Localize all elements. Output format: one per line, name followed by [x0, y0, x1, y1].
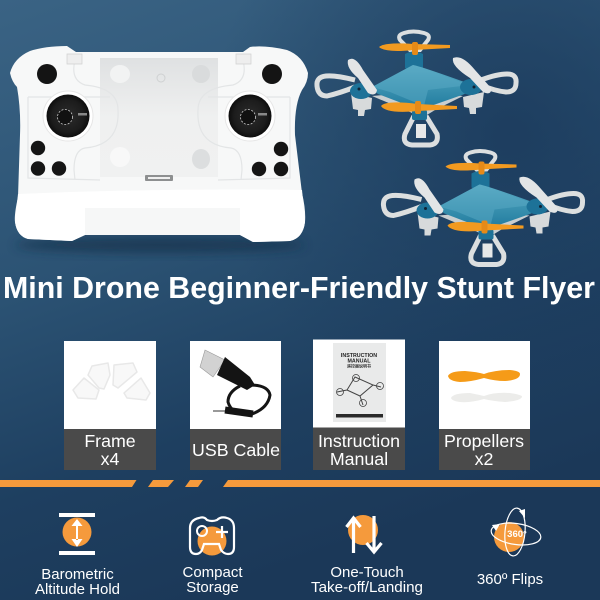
small buttons: [31, 141, 288, 176]
label: Barometric: [41, 566, 114, 583]
orange stripe: [0, 480, 600, 487]
feature: one-touch take-off/landing: Take-off/Landing: [311, 579, 423, 596]
icon: frames: [73, 363, 150, 400]
label: Propellers: [444, 431, 524, 451]
icon: manual: INSTRUCTION: [341, 353, 377, 359]
icon: up and down arrows: [346, 515, 382, 553]
drone: upper: [317, 32, 516, 145]
battery recess: [100, 58, 218, 177]
controller body: [10, 46, 308, 242]
controller: [10, 46, 308, 253]
card: usb cable: [190, 341, 281, 470]
title: Mini Drone Beginner-Friendly Stunt Flyer: [3, 270, 595, 305]
feature: compact storage: [182, 517, 243, 596]
feature: 360 flips: [477, 507, 543, 588]
feature: one-touch take-off/landing: [311, 515, 423, 596]
feature: compact storage: Storage: [186, 579, 239, 596]
icon: manual: MANUAL: [348, 358, 371, 364]
icon: orange propeller: [448, 370, 520, 382]
icon: altitude: [59, 513, 95, 555]
card: propellers: x2: [475, 449, 493, 469]
label: USB Cable: [192, 440, 280, 460]
feature: barometric altitude hold: [35, 513, 120, 598]
label: One-Touch: [330, 564, 404, 581]
icon: manual: 遥控器说明书: [347, 362, 371, 368]
label: 360º Flips: [477, 571, 543, 588]
label: Compact: [182, 564, 243, 581]
left joystick: [43, 91, 93, 141]
icon: manual: [333, 343, 386, 422]
card: instruction manual: Manual: [330, 449, 388, 469]
label: Instruction: [318, 431, 400, 451]
latch: [145, 175, 173, 181]
hinge corners: [67, 54, 251, 64]
trace outlines: [28, 60, 290, 180]
icon: 360: 360°: [507, 529, 527, 540]
icon: gamepad: [190, 517, 234, 556]
icon: white propeller: [451, 393, 522, 402]
icon: usb cable: [200, 350, 270, 414]
drone: lower: [383, 151, 583, 264]
card: instruction manual: [313, 340, 405, 470]
shoulder buttons: [37, 64, 57, 84]
card: propellers: [439, 341, 530, 470]
card: frame: x4: [101, 449, 120, 469]
card: frame: [64, 341, 156, 470]
feature: barometric altitude hold: Altitude Hold: [35, 581, 120, 598]
right joystick: [225, 91, 275, 141]
label: Frame: [84, 431, 136, 451]
